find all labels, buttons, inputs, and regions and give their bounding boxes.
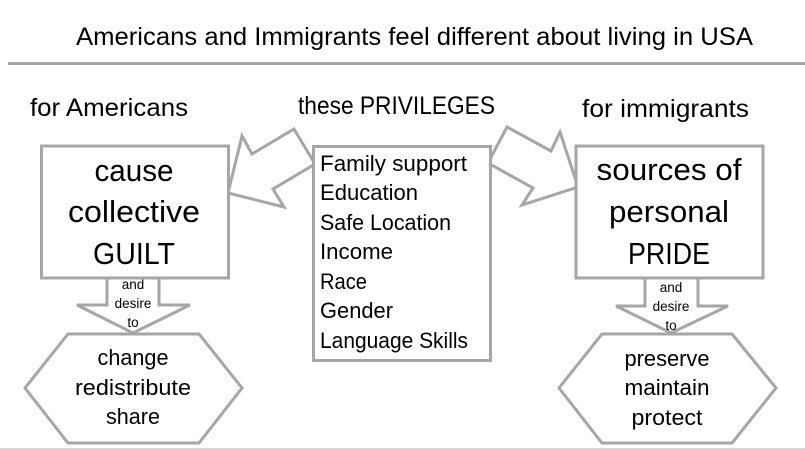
list item: Gender: Gender bbox=[320, 298, 393, 323]
panel: change redistribute share: redistribute bbox=[75, 375, 191, 400]
heading: for immigrants: for immigrants bbox=[582, 95, 749, 123]
panel: personal pride bbox=[576, 146, 763, 278]
arrow: pride to preserve: and bbox=[660, 280, 682, 295]
arrow: pride to preserve: to bbox=[665, 318, 677, 333]
arrow: pride to preserve bbox=[616, 278, 728, 333]
panel: change redistribute share bbox=[25, 334, 242, 443]
panel: personal pride: sources of bbox=[596, 152, 742, 187]
arrow: guilt to change: to bbox=[127, 315, 139, 330]
arrow: guilt to change bbox=[77, 277, 190, 333]
arrow: guilt to change: desire bbox=[115, 296, 151, 311]
panel: collective guilt: GUILT bbox=[93, 236, 175, 271]
list item: Safe Location: Safe Location bbox=[320, 210, 451, 235]
panel: collective guilt: collective bbox=[68, 194, 200, 229]
panel: collective guilt: cause bbox=[94, 153, 174, 188]
panel: personal pride: PRIDE bbox=[628, 236, 710, 271]
panel: preserve maintain protect: protect bbox=[632, 405, 702, 430]
arrow: privileges to Americans bbox=[228, 129, 315, 207]
list item: Education: Education bbox=[320, 180, 418, 205]
list item: Language Skills: Language Skills bbox=[320, 328, 468, 353]
panel: preserve maintain protect: preserve bbox=[624, 346, 710, 371]
panel: collective guilt bbox=[42, 146, 228, 278]
title: Americans and Immigrants feel different about living in USA bbox=[76, 23, 753, 51]
list item: Income: Income bbox=[320, 239, 393, 264]
panel: change redistribute share: change bbox=[98, 345, 168, 370]
heading: these PRIVILEGES: these PRIVILEGES bbox=[298, 92, 495, 120]
panel: privileges list bbox=[314, 146, 490, 360]
arrow: privileges to immigrants bbox=[488, 127, 578, 205]
panel: preserve maintain protect: maintain bbox=[624, 375, 710, 400]
panel: personal pride: personal bbox=[609, 194, 729, 229]
heading: for Americans: for Americans bbox=[30, 94, 188, 122]
panel: preserve maintain protect bbox=[559, 334, 776, 443]
list item: Race: Race bbox=[320, 269, 367, 294]
arrow: guilt to change: and bbox=[122, 277, 144, 292]
list item: Family support: Family support bbox=[320, 151, 467, 176]
panel: change redistribute share: share bbox=[106, 404, 160, 429]
arrow: pride to preserve: desire bbox=[653, 299, 689, 314]
